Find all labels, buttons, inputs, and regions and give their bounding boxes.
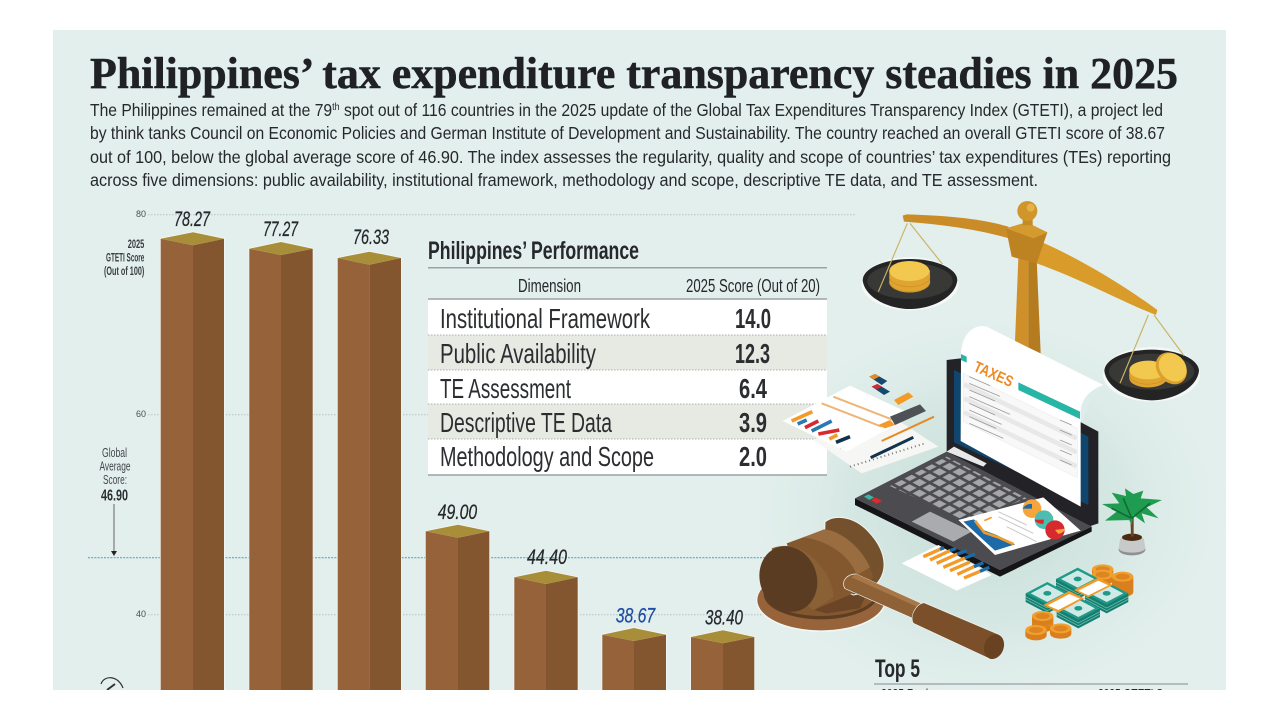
bar: 49.00: [426, 501, 489, 690]
row: Methodology and Scope: Methodology and Scope: [440, 441, 654, 472]
table title: Philippines’ Performance: [428, 237, 639, 265]
illustration glow: [735, 305, 1235, 715]
icon: report sheet on laptop: [958, 497, 1081, 555]
y axis title: (Out of 100): [104, 264, 144, 278]
table rows background: [428, 299, 827, 475]
row: Descriptive TE Data: Descriptive TE Data: [440, 407, 612, 438]
title: Philippines’ tax expenditure transparency steadies in 2025: [90, 49, 1178, 98]
row: Public Availability: 12.3: [735, 338, 770, 369]
bar: 76.33: [338, 226, 401, 690]
row: Institutional Framework: Institutional Framework: [440, 303, 651, 334]
icon: partial emblem: [101, 678, 123, 690]
y axis labels: 40: [136, 609, 146, 620]
intro text block: th: [332, 102, 340, 113]
bar: 44.40: [514, 546, 578, 690]
bar: 77.27: 77.27: [263, 218, 299, 241]
icon: tax document: TAXES: [971, 358, 1016, 391]
global average callout: [100, 445, 130, 556]
intro text block: out of 100, below the global average score of 46.90. The index assesses the regularity, quality and scope of countries’ tax expenditures (TEs) reporting: [90, 147, 1171, 167]
y axis title: 2025: [128, 237, 144, 251]
icon: cash bundles and coins: [1025, 564, 1133, 640]
bar: 78.27: [161, 208, 224, 690]
global average callout: Score:: [103, 472, 127, 487]
global average callout: Average: [100, 459, 130, 474]
bar: 78.27: 78.27: [174, 208, 211, 231]
row: Public Availability: [440, 338, 770, 369]
table header: 2025 Score (Out of 20): [686, 276, 820, 296]
bar: 44.40: 44.40: [527, 546, 567, 569]
row: TE Assessment: 6.4: [739, 373, 767, 404]
global average callout: 46.90: [101, 488, 128, 505]
icon: gavel: [750, 517, 1007, 662]
icon: papers and stationery: [783, 374, 938, 473]
global average line: [88, 557, 770, 559]
icon: potted plant: [1102, 488, 1162, 555]
bar: 77.27: [249, 218, 313, 690]
intro text block: The Philippines remained at the 79: [90, 100, 360, 120]
section: Top 5: [874, 655, 1188, 701]
row: Methodology and Scope: 2.0: [739, 441, 767, 472]
bar: 49.00: 49.00: [438, 501, 477, 524]
y axis labels: 80: [136, 209, 146, 220]
icon: laptop: [855, 358, 1098, 577]
bar: 38.40: [691, 606, 754, 690]
y axis title: [104, 237, 144, 278]
section: Top 5: 2025 GTETI S: [1098, 686, 1163, 701]
row: Institutional Framework: 14.0: [735, 303, 771, 334]
bar: 76.33: 76.33: [353, 226, 389, 249]
chart: GTETI scores: [88, 208, 855, 690]
bottom white crop: [0, 690, 1280, 720]
row: Public Availability: Public Availability: [440, 338, 596, 369]
table header: Dimension: [518, 276, 581, 296]
intro text block: across five dimensions: public availability, institutional framework, methodology and scope, descriptive TE data, and TE assessment.: [90, 170, 1038, 190]
bar: 38.67 Philippines: [602, 605, 666, 690]
panel: Philippines' Performance table: [428, 237, 827, 475]
illustration: scale, laptop, gavel, money: [750, 201, 1200, 662]
intro text block: [90, 100, 1171, 190]
y axis labels: [136, 209, 146, 620]
intro text block: by think tanks Council on Economic Policies and German Institute of Development and Sustainability. The country reached an overall GTETI score of 38.67: [90, 123, 1165, 143]
y axis labels: 60: [136, 409, 146, 420]
icon: chart sheet under laptop: [902, 545, 992, 591]
right pan: [1103, 347, 1200, 402]
bar: 38.40: 38.40: [705, 606, 743, 629]
row: TE Assessment: TE Assessment: [440, 373, 571, 404]
section: Top 5: Top 5: [875, 655, 920, 683]
section: Top 5: 2025 Rank: [881, 686, 931, 701]
icon: balance scale: [861, 201, 1200, 402]
table header: [518, 276, 820, 296]
icon: tax document: [961, 326, 1103, 507]
intro text block: spot out of 116 countries in the 2025 update of the Global Tax Expenditures Transparency Index (GTETI), a project led: [340, 100, 1163, 120]
row: Descriptive TE Data: 3.9: [739, 407, 767, 438]
global average callout: Global: [102, 445, 127, 460]
y axis grid lines: [148, 215, 855, 615]
y axis title: GTETI Score: [106, 250, 144, 264]
bar: 38.67 Philippines: 38.67: [616, 605, 656, 628]
left pan: [861, 257, 959, 310]
row: TE Assessment: [440, 373, 767, 404]
